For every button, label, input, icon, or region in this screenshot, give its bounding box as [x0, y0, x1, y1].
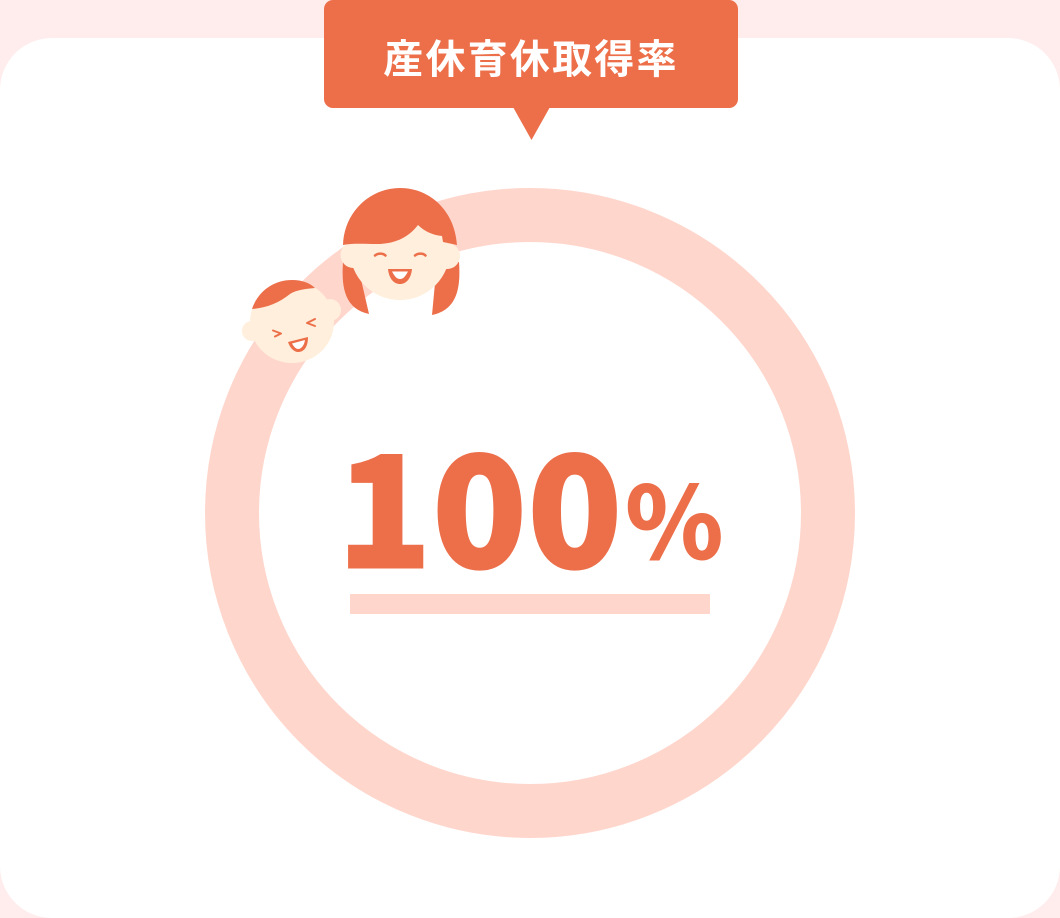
underline bar [350, 594, 710, 614]
icon: mother [340, 188, 460, 315]
percent sign: % [625, 443, 724, 588]
percentage value: 100 [337, 393, 623, 612]
title callout [324, 0, 738, 140]
icon: baby [242, 280, 341, 363]
title callout: 産休育休取得率 [383, 38, 679, 82]
progress ring [232, 215, 828, 811]
